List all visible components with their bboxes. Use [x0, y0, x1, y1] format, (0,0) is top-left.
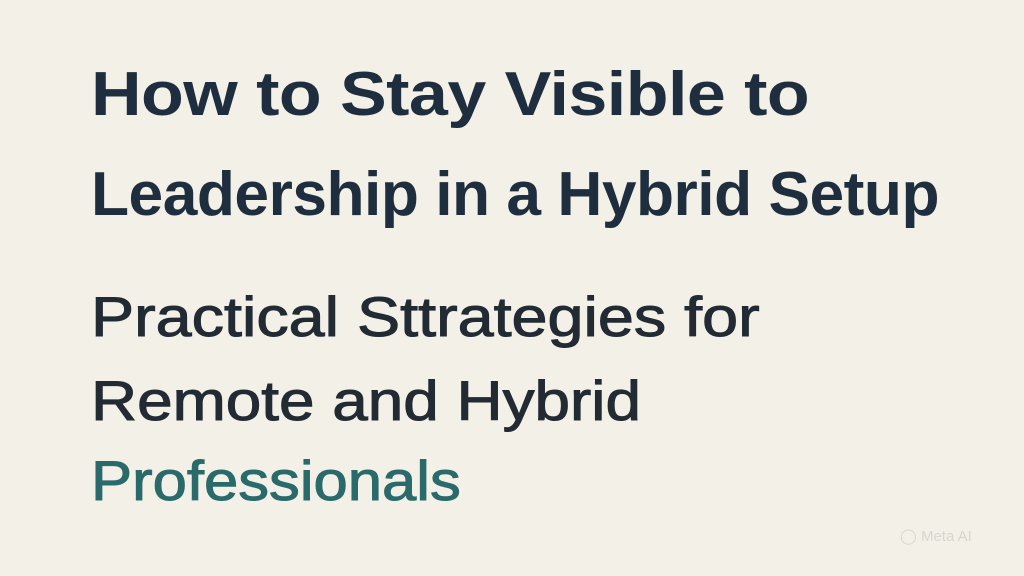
title line 2: Leadership in a Hybrid Setup — [91, 160, 939, 229]
title — [91, 60, 939, 229]
subtitle line 1: Practical Sttrategies for — [91, 285, 760, 348]
subtitle — [91, 285, 760, 512]
title line 1: How to Stay Visible to — [91, 60, 809, 129]
watermark: ◯ Meta AI — [900, 528, 972, 545]
subtitle line 2: Remote and Hybrid — [91, 369, 641, 432]
subtitle line 3 highlighted: Professionals — [91, 449, 461, 512]
